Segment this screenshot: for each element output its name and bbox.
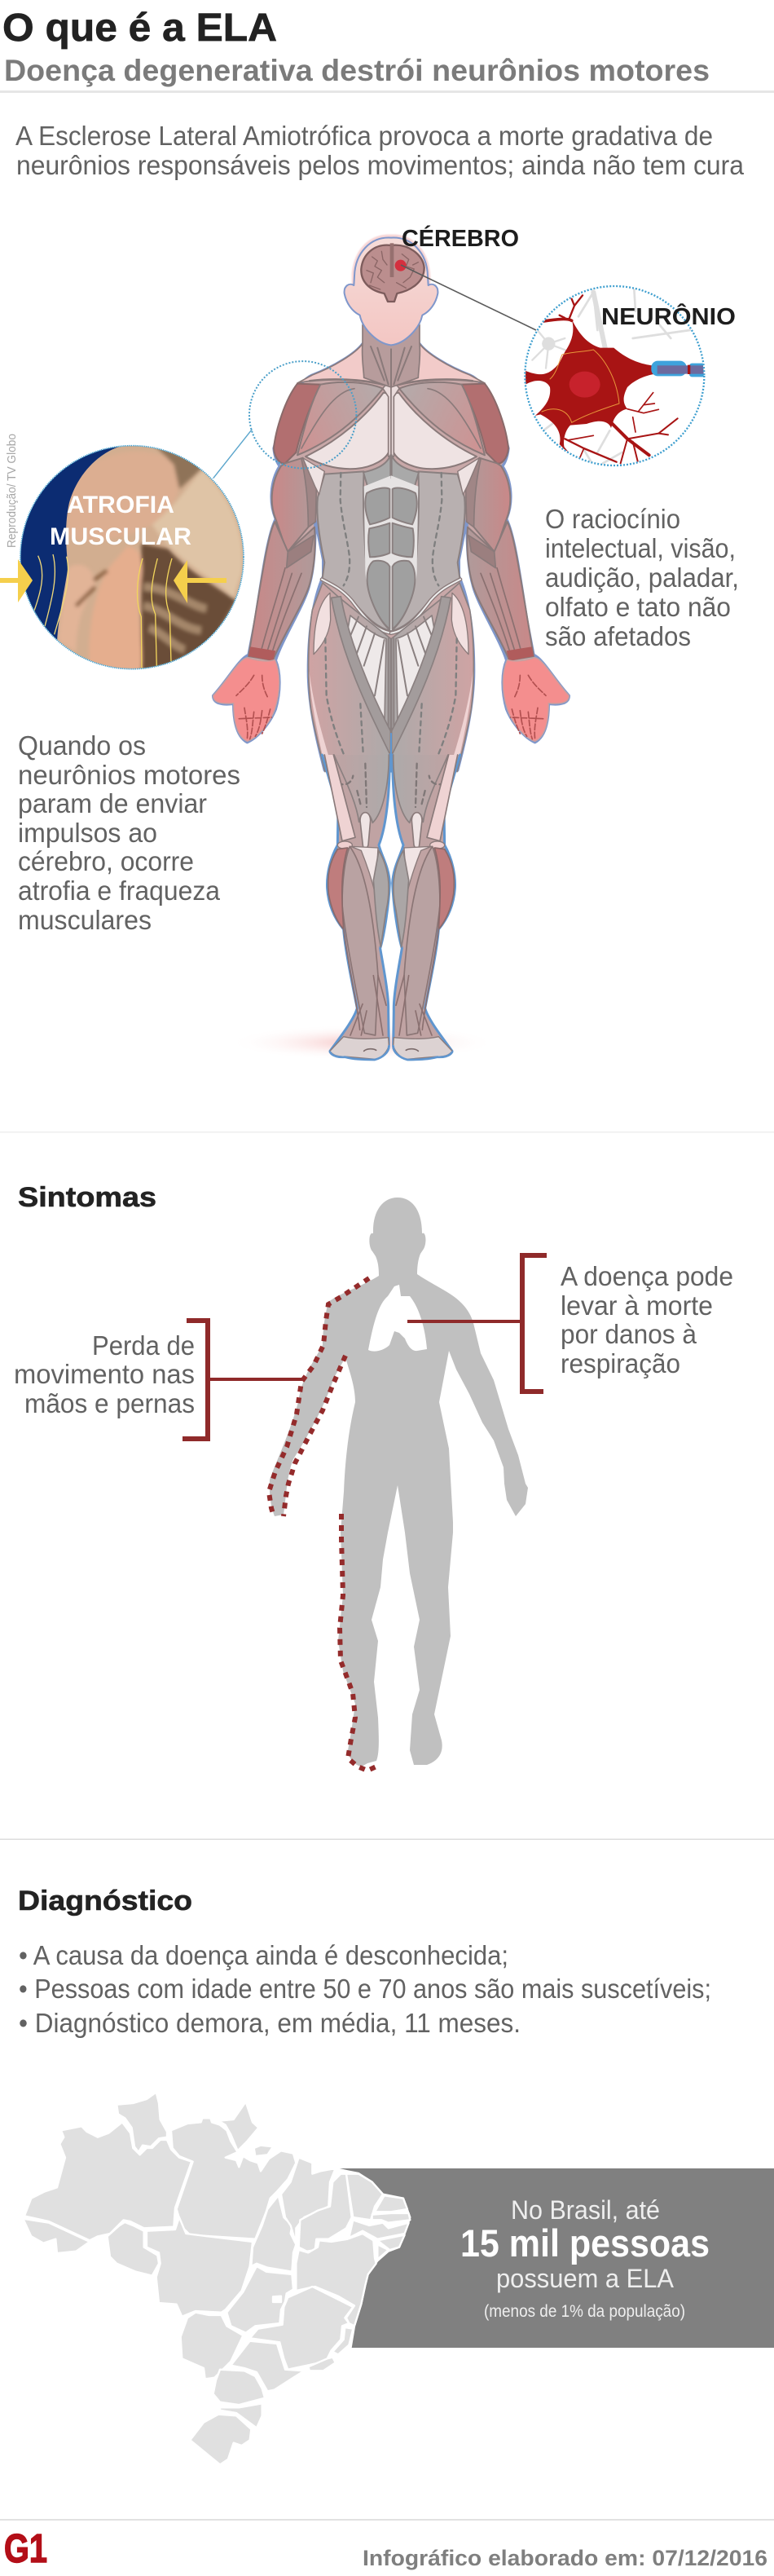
intro text xyxy=(15,121,745,180)
text: motor neurons: impulsos ao xyxy=(18,818,157,848)
intro text: neurônios responsáveis pelos movimentos; ainda não tem cura xyxy=(16,150,745,180)
intro text: A Esclerose Lateral Amiotrófica provoca a morte gradativa de xyxy=(15,121,713,151)
right beige xyxy=(152,470,243,598)
pectoral muscle xyxy=(297,382,383,455)
diagnosis bullets xyxy=(19,1940,711,2038)
head xyxy=(345,235,438,387)
text: respiration xyxy=(561,1261,733,1378)
gray statistic band xyxy=(336,2168,774,2348)
label: neurônio: NEURÔNIO xyxy=(601,302,736,330)
bracket callout right xyxy=(407,1253,547,1394)
sternum xyxy=(383,383,391,457)
neck xyxy=(363,324,420,387)
ab block 1 xyxy=(365,488,389,524)
triceps stripe xyxy=(301,458,316,527)
thigh xyxy=(309,583,390,772)
inner calf xyxy=(373,850,389,947)
shin light area xyxy=(351,846,378,894)
statistic text: possuem a ELA xyxy=(496,2264,675,2293)
neuron dotted ring xyxy=(525,286,704,465)
label: cérebro: CÉREBRO xyxy=(402,224,519,252)
map of Brazil xyxy=(23,2093,410,2464)
leg outline xyxy=(322,755,389,1059)
dendrites xyxy=(543,295,678,463)
trapezius xyxy=(297,344,391,385)
serratus xyxy=(303,458,324,495)
adductor white panel xyxy=(348,615,386,736)
statistic text: No Brasil, até xyxy=(511,2195,660,2225)
hip band xyxy=(322,580,391,633)
text: motor neurons: musculares xyxy=(18,905,152,935)
soma xyxy=(526,320,657,450)
text: respiration: por danos à xyxy=(561,1319,697,1349)
statistic text: (menos de 1% da população) xyxy=(484,2302,685,2321)
title: O que é a ELA xyxy=(2,7,277,50)
bracket callout left xyxy=(183,1318,302,1441)
text: movement loss: mãos e pernas xyxy=(24,1388,195,1418)
collar bone xyxy=(310,379,383,385)
patella tendon xyxy=(360,813,371,849)
floor shadow xyxy=(228,1025,497,1061)
gray human silhouette xyxy=(270,1198,528,1767)
thigh dashes xyxy=(325,638,364,768)
membrane outline xyxy=(542,350,619,422)
central muscle xyxy=(89,546,143,671)
brain xyxy=(361,245,424,302)
text: movement loss: movimento nas xyxy=(14,1359,195,1389)
label: atrofia muscular: ATROFIA xyxy=(67,492,174,518)
statistic text: 15 mil pessoas xyxy=(460,2221,710,2265)
deltoid xyxy=(274,384,320,464)
text: motor neurons: param de enviar xyxy=(18,788,207,818)
upper arm xyxy=(272,458,315,552)
heading: diagnóstico: Diagnóstico xyxy=(18,1886,192,1917)
connector line shoulder to atrophy image xyxy=(213,430,252,479)
silhouette outline xyxy=(213,344,363,770)
face and skull xyxy=(345,238,438,345)
atrophy circle xyxy=(16,440,250,674)
text: respiration: respiração xyxy=(561,1348,680,1378)
neuron circle xyxy=(525,286,706,465)
heading: sintomas: Sintomas xyxy=(18,1182,156,1213)
text: motor neurons: cérebro, ocorre xyxy=(18,846,194,876)
text: motor neurons: neurônios motores xyxy=(18,760,240,790)
subtitle: Doença degenerativa destrói neurônios motores xyxy=(4,54,710,87)
diagnosis bullets: • A causa da doença ainda é desconhecida; xyxy=(19,1940,508,1970)
left half of body: upper part xyxy=(213,344,391,1060)
thigh pink band xyxy=(324,755,355,841)
knee cap xyxy=(337,841,352,849)
lower right dark xyxy=(141,544,236,671)
arrow: right yellow xyxy=(174,560,226,603)
upper abdominal xyxy=(363,455,390,488)
ab block 3 xyxy=(367,561,389,629)
abs background xyxy=(364,475,391,630)
text: respiration: A doença pode xyxy=(561,1261,733,1291)
lungs xyxy=(368,1285,427,1352)
brain highlight xyxy=(395,260,407,271)
text: respiration: levar à morte xyxy=(561,1290,713,1321)
background neurons xyxy=(532,289,690,463)
left half of body: lower leg xyxy=(322,755,389,1060)
lower thigh xyxy=(334,755,389,823)
text: motor neurons: atrofia e fraqueza xyxy=(18,876,221,906)
main calf xyxy=(342,846,378,1035)
outer thigh pink strip xyxy=(309,671,333,772)
left muscle xyxy=(59,565,95,652)
nucleus xyxy=(570,372,600,398)
axon xyxy=(657,365,705,374)
connector line brain to neuron xyxy=(401,265,536,330)
diagnosis bullets: • Pessoas com idade entre 50 e 70 anos são mais suscetíveis; xyxy=(19,1974,711,2004)
text: movement loss xyxy=(14,1330,195,1418)
label: atrofia muscular xyxy=(50,492,191,550)
dashed muscle line xyxy=(341,473,350,585)
G1 logo: G1 xyxy=(4,2527,47,2571)
hip white panel xyxy=(314,593,331,655)
text: motor neurons: Quando os xyxy=(18,730,146,761)
hand xyxy=(213,658,279,741)
right half of body xyxy=(391,344,569,1060)
axon sheath xyxy=(651,361,687,376)
sartorius band xyxy=(332,597,390,756)
arrow: left yellow xyxy=(0,559,33,602)
foot xyxy=(330,1037,389,1059)
image credit: Reprodução/ TV Globo xyxy=(5,434,19,548)
chest panel xyxy=(306,393,389,469)
inner blue seam xyxy=(389,734,394,772)
dotted affected arm xyxy=(269,1278,369,1516)
text: unaffected senses: O raciocínio xyxy=(545,504,680,534)
text: unaffected senses xyxy=(545,504,739,651)
wrist xyxy=(248,646,275,661)
text: movement loss: Perda de xyxy=(92,1330,195,1361)
ab block 2 xyxy=(368,523,389,557)
top dark xyxy=(155,448,202,489)
oblique muscle xyxy=(317,471,391,631)
label: atrofia muscular: MUSCULAR xyxy=(50,523,191,550)
dotted affected leg xyxy=(340,1514,378,1771)
flesh base xyxy=(16,440,250,674)
text: unaffected senses: intelectual, visão, xyxy=(545,533,736,563)
text: unaffected senses: audição, paladar, xyxy=(545,562,739,593)
blue background xyxy=(20,447,120,640)
forearm xyxy=(248,522,315,660)
diagnosis bullets: • Diagnóstico demora, em média, 11 meses. xyxy=(19,2008,521,2038)
footer credit: Infográfico elaborado em: 07/12/2016 xyxy=(363,2546,767,2570)
shoulder zoom circle xyxy=(249,361,356,468)
silhouette fill xyxy=(213,344,391,770)
text: motor neurons xyxy=(18,730,240,935)
pink halo xyxy=(352,235,430,303)
text: unaffected senses: olfato e tato não xyxy=(545,592,731,622)
map east coast underlay xyxy=(288,2168,410,2358)
text: unaffected senses: são afetados xyxy=(545,621,691,651)
upper muscle xyxy=(65,452,180,541)
statistic text xyxy=(460,2195,710,2321)
outer calf xyxy=(328,848,348,929)
